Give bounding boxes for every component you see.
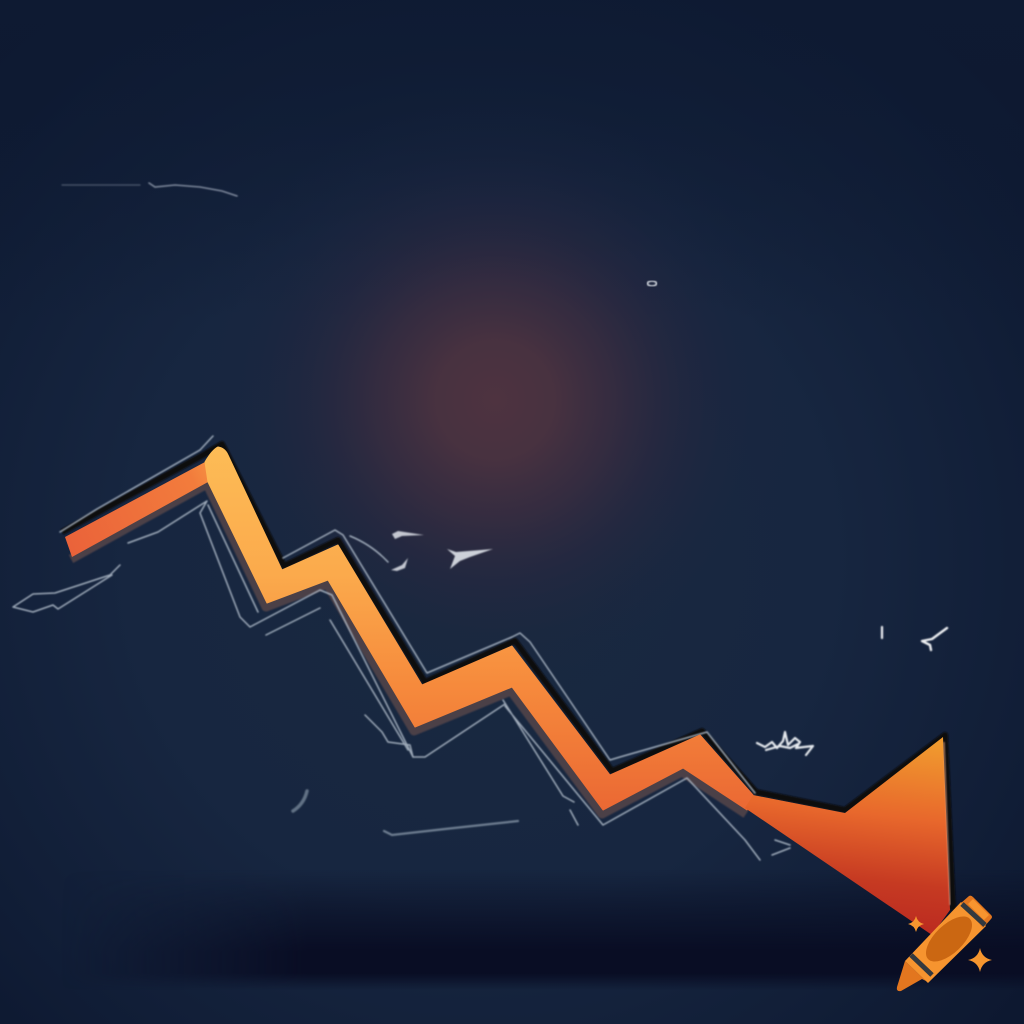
outline: loose strokes (266, 536, 790, 855)
crayon tip (897, 961, 926, 991)
icon: large sparkle (968, 948, 992, 972)
arrow: zigzag body (205, 447, 753, 810)
sketch marks: squiggle by arrow head (757, 732, 813, 755)
crayon stripes (911, 904, 985, 975)
sketch marks: top left stroke (62, 183, 237, 196)
ground shadow band (148, 892, 1024, 985)
crayon end highlight (968, 899, 989, 920)
sketch marks: top right tick and check (882, 627, 947, 650)
crayon end cap (961, 896, 992, 928)
crayon label ellipse (918, 909, 980, 969)
sketch marks: birds near peak (391, 531, 493, 571)
arrow: triangular head (745, 737, 950, 935)
crayon body (905, 902, 986, 983)
sketch marks: lower left strokes (293, 791, 518, 835)
sketch mark: small ring (648, 281, 656, 286)
arrow shadow: lower brown edge (71, 484, 746, 814)
icon: small sparkle (908, 916, 924, 932)
sketch outlines around the arrow (13, 436, 790, 860)
outline: detached left sketch (13, 565, 120, 612)
outline: inner parallel line (208, 505, 408, 750)
outline: upper edge first segment (60, 436, 213, 532)
arrow head: pale right edge highlight (944, 742, 950, 905)
outline: lower edge zigzag (503, 700, 760, 860)
outline: lower edge first segment (128, 501, 505, 757)
outline: upper edge zigzag (283, 530, 755, 793)
icon: crayon watermark (897, 896, 992, 991)
arrow shadow: black upper edge (62, 444, 953, 910)
arrow: first orange segment (65, 462, 222, 557)
